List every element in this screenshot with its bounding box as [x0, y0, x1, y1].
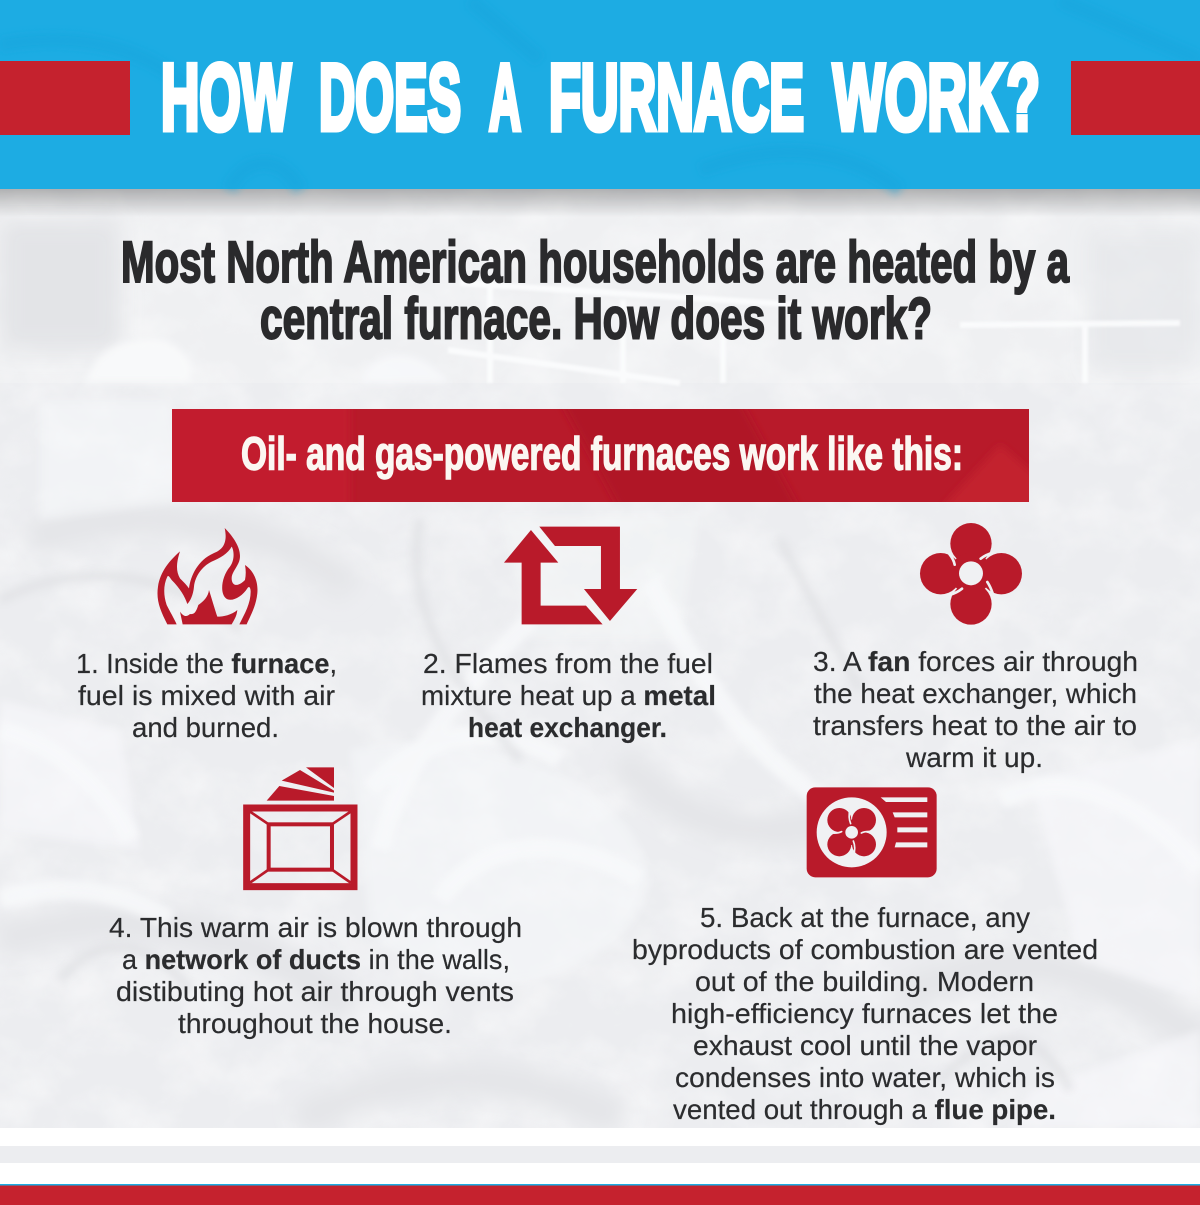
step 4 text: throughout the house.: [178, 1008, 452, 1039]
step 3 text: warm it up.: [905, 742, 1043, 773]
title: DOES: [319, 45, 461, 150]
title: HOW: [161, 45, 291, 150]
subtitle: [121, 230, 1070, 352]
step 3 text: [813, 646, 1138, 773]
step 1 text: 1. Inside the furnace,: [76, 648, 337, 679]
step 3 text: the heat exchanger, which: [814, 678, 1137, 709]
step 5 text: condenses into water, which is: [675, 1062, 1055, 1093]
footer stripes: [0, 1128, 1200, 1205]
title: WORK?: [833, 45, 1040, 150]
icon: air duct: [247, 767, 354, 887]
icon: flame: [157, 528, 257, 624]
step 5 text: out of the building. Modern: [695, 966, 1034, 997]
step 5 text: 5. Back at the furnace, any: [700, 902, 1030, 933]
step 4 text: a network of ducts in the walls,: [122, 944, 510, 975]
icon: fan: [920, 523, 1022, 625]
step 2 text: [421, 648, 716, 743]
icon: outdoor unit: [807, 787, 937, 877]
title: A: [489, 45, 521, 150]
subtitle: central furnace. How does it work?: [260, 286, 932, 352]
header band: [0, 0, 1200, 217]
step 1 text: fuel is mixed with air: [78, 680, 335, 711]
step 5 text: vented out through a flue pipe.: [673, 1094, 1056, 1125]
step 5 text: exhaust cool until the vapor: [693, 1030, 1037, 1061]
step 5 text: high-efficiency furnaces let the: [671, 998, 1058, 1029]
step 3 text: transfers heat to the air to: [813, 710, 1137, 741]
step 3 text: 3. A fan forces air through: [813, 646, 1138, 677]
step 1 text: [76, 648, 337, 743]
step 4 text: 4. This warm air is blown through: [109, 912, 522, 943]
step 2 text: heat exchanger.: [468, 712, 667, 743]
step 2 text: mixture heat up a metal: [421, 680, 716, 711]
red bar left: [0, 61, 130, 135]
step 4 text: distibuting hot air through vents: [116, 976, 514, 1007]
icon: recycling arrows: [504, 527, 637, 624]
red bar right: [1071, 61, 1200, 135]
banner: oil and gas furnaces: [172, 409, 1029, 502]
step 5 text: byproducts of combustion are vented: [632, 934, 1098, 965]
title: [161, 45, 1040, 150]
step 2 text: 2. Flames from the fuel: [423, 648, 713, 679]
title: FURNACE: [549, 45, 804, 150]
step 1 text: and burned.: [132, 712, 279, 743]
background: machinery pipes texture: [0, 189, 1200, 1128]
step 5 text: [632, 902, 1098, 1125]
step 4 text: [109, 912, 522, 1039]
